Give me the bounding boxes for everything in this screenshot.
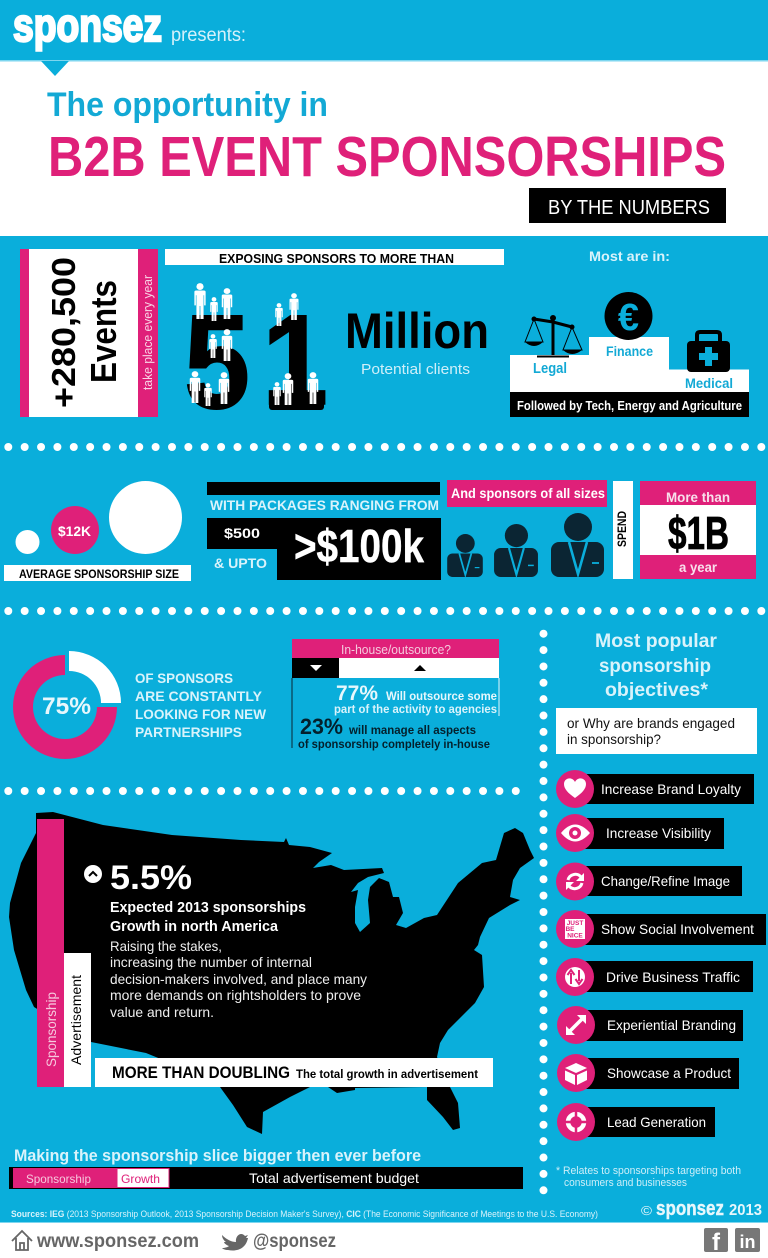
- presents label: presents:: [171, 25, 246, 46]
- spend bar: SPEND: [615, 511, 629, 547]
- chart bars: sponsorship vs advertisement: Advertisement: [68, 975, 84, 1065]
- average sponsorship size bubbles: [4, 481, 191, 581]
- heading: most popular objectives: Most popular: [595, 631, 718, 652]
- objective: lead generation: Lead Generation: [607, 1114, 706, 1130]
- most are in: podium: Most are in:: [589, 248, 670, 264]
- copyright: 2013: [729, 1202, 762, 1219]
- icon: facebook: f: [712, 1229, 721, 1256]
- events panel: +280,500: [45, 257, 82, 408]
- objective: showcase product: [557, 1054, 739, 1092]
- objective: experiential branding: Experiential Branding: [607, 1017, 736, 1033]
- objective: business traffic: Drive Business Traffic: [606, 969, 740, 985]
- average sponsorship size bubbles: AVERAGE SPONSORSHIP SIZE: [19, 567, 179, 581]
- growth 5.5%: Expected 2013 sponsorships: [110, 899, 306, 916]
- figure: 51 with people: 1: [262, 289, 328, 432]
- growth 5.5%: increasing the number of internal: [110, 954, 312, 970]
- objective: visibility: Increase Visibility: [606, 825, 711, 841]
- in-house / outsource panel: Will outsource some: [386, 689, 497, 703]
- objective: showcase product: Showcase a Product: [607, 1065, 731, 1081]
- packages range: [207, 482, 441, 580]
- icon: medical case: [687, 332, 730, 372]
- most are in: podium: [510, 248, 749, 417]
- most are in: podium: Finance: [606, 343, 653, 359]
- text: of sponsors: LOOKING FOR NEW: [135, 706, 267, 722]
- more than doubling callout: [95, 1058, 493, 1087]
- footnote: * Relates to sponsorships targeting both: [556, 1165, 741, 1177]
- footnote: [556, 1165, 741, 1189]
- packages range: WITH PACKAGES RANGING FROM: [210, 497, 439, 513]
- in-house / outsource panel: 23%: [300, 714, 343, 739]
- website: www.sponsez.com: [36, 1231, 199, 1252]
- in-house / outsource panel: of sponsorship completely in-house: [298, 737, 490, 751]
- growth 5.5%: value and return.: [110, 1004, 214, 1020]
- chart bars: sponsorship vs advertisement: [37, 819, 91, 1087]
- budget bar: Sponsorship: [26, 1172, 91, 1186]
- icon: facebook: [704, 1228, 728, 1256]
- more than $1B a year: a year: [679, 559, 718, 575]
- most are in: podium: Legal: [533, 360, 567, 377]
- in-house / outsource panel: [292, 639, 499, 751]
- header band: [0, 0, 768, 60]
- growth 5.5%: [84, 859, 367, 1020]
- budget bar: Making the sponsorship slice bigger then ever before: [14, 1146, 421, 1165]
- text: of sponsors: PARTNERSHIPS: [135, 724, 242, 740]
- copyright: ©: [641, 1203, 652, 1218]
- budget bar: Growth: [121, 1172, 160, 1186]
- by the numbers badge: BY THE NUMBERS: [548, 197, 710, 219]
- icon: scales: [525, 315, 582, 356]
- donut 75%: [13, 651, 121, 759]
- heading: most popular objectives: sponsorship: [599, 656, 711, 677]
- growth 5.5%: decision-makers involved, and place many: [110, 971, 367, 987]
- more than doubling callout: The total growth in advertisement: [296, 1067, 478, 1081]
- icon: twitter bird: [222, 1234, 248, 1250]
- logo: sponsez: sponsez: [13, 0, 162, 51]
- packages range: & UPTO: [214, 555, 267, 571]
- million potential clients: Million: [345, 303, 489, 359]
- donut 75%: 75%: [42, 693, 91, 720]
- icon: linkedin: [735, 1228, 760, 1252]
- objective: social involvement: NICE: [567, 932, 583, 940]
- most are in: podium: Medical: [685, 375, 733, 391]
- objective: visibility: [556, 814, 724, 852]
- title panel: [0, 60, 768, 236]
- in-house / outsource panel: 77%: [336, 682, 378, 705]
- icon: linkedin: in: [740, 1232, 756, 1252]
- more than $1B a year: $1B: [668, 507, 729, 559]
- million potential clients: [345, 303, 489, 378]
- text: of sponsors: [135, 670, 267, 740]
- budget bar: [9, 1146, 523, 1189]
- spend bar: [613, 481, 633, 579]
- question box: or Why are brands engaged: [567, 715, 735, 731]
- text: of sponsors: OF SPONSORS: [135, 670, 233, 686]
- objective: social involvement: Show Social Involvement: [601, 921, 754, 937]
- objective: social involvement: JUST: [567, 920, 583, 927]
- in-house / outsource panel: part of the activity to agencies: [334, 702, 497, 716]
- heading: exposing sponsors: EXPOSING SPONSORS TO MORE THAN: [219, 251, 454, 266]
- packages range: $500: [224, 525, 260, 541]
- heading: exposing sponsors: [165, 249, 504, 266]
- million potential clients: Potential clients: [361, 361, 470, 378]
- copyright: sponsez: [656, 1198, 724, 1220]
- most are in: podium: Followed by Tech, Energy and Agriculture: [517, 398, 742, 413]
- packages range: >$100k: [294, 520, 424, 572]
- events panel: Events: [83, 280, 124, 383]
- more than $1B a year: More than: [666, 489, 730, 505]
- footer: [0, 1222, 768, 1258]
- map of USA: [9, 812, 534, 1134]
- in-house / outsource panel: In-house/outsource?: [341, 642, 451, 657]
- footnote: consumers and businesses: [564, 1177, 687, 1189]
- figure: 51 with people: [184, 283, 328, 437]
- objective: change image: Change/Refine Image: [601, 873, 730, 889]
- icon: house: [12, 1231, 32, 1250]
- objective: experiential branding: [557, 1006, 743, 1044]
- more than $1B a year: [640, 481, 756, 579]
- budget bar: Total advertisement budget: [249, 1170, 419, 1186]
- question box: in sponsorship?: [567, 731, 661, 747]
- in-house / outsource panel: will manage all aspects: [348, 723, 476, 737]
- by the numbers badge: [529, 188, 726, 223]
- text: of sponsors: ARE CONSTANTLY: [135, 688, 263, 704]
- heading: most popular objectives: objectives*: [605, 680, 709, 701]
- objective: brand loyalty: [556, 770, 754, 808]
- objective: change image: [556, 862, 742, 900]
- objective: social involvement: BE: [565, 926, 575, 933]
- sponsors of all sizes: And sponsors of all sizes: [451, 485, 605, 501]
- growth 5.5%: Growth in north America: [110, 918, 279, 935]
- events panel: [20, 249, 158, 417]
- growth 5.5%: Raising the stakes,: [110, 938, 222, 954]
- more than doubling callout: MORE THAN DOUBLING: [112, 1063, 290, 1082]
- sources: Sources: IEG (2013 Sponsorship Outlook, 2013 Sponsorship Decision Maker's Survey), CIC (The Economic Significance of Meetings to the U.S. Economy): [11, 1209, 598, 1219]
- average sponsorship size bubbles: $12K: [58, 523, 91, 539]
- icon: euro: [604, 292, 652, 340]
- objective: social involvement: [556, 910, 766, 948]
- figure: 51 with people: 5: [184, 288, 250, 437]
- question box: [556, 708, 757, 754]
- chart bars: sponsorship vs advertisement: Sponsorship: [43, 992, 59, 1067]
- growth 5.5%: more demands on rightsholders to prove: [110, 987, 361, 1003]
- title line 1: The opportunity in: [47, 86, 328, 124]
- twitter handle: @sponsez: [253, 1231, 336, 1252]
- copyright: [641, 1198, 762, 1220]
- objective: business traffic: [556, 958, 753, 996]
- events panel: take place every year: [140, 274, 155, 390]
- objective: brand loyalty: Increase Brand Loyalty: [601, 781, 741, 797]
- sponsors of all sizes: [447, 480, 607, 577]
- growth 5.5%: 5.5%: [110, 859, 192, 897]
- objective: lead generation: [557, 1103, 715, 1141]
- heading: most popular objectives: [595, 631, 718, 701]
- icon: euro: €: [618, 297, 639, 339]
